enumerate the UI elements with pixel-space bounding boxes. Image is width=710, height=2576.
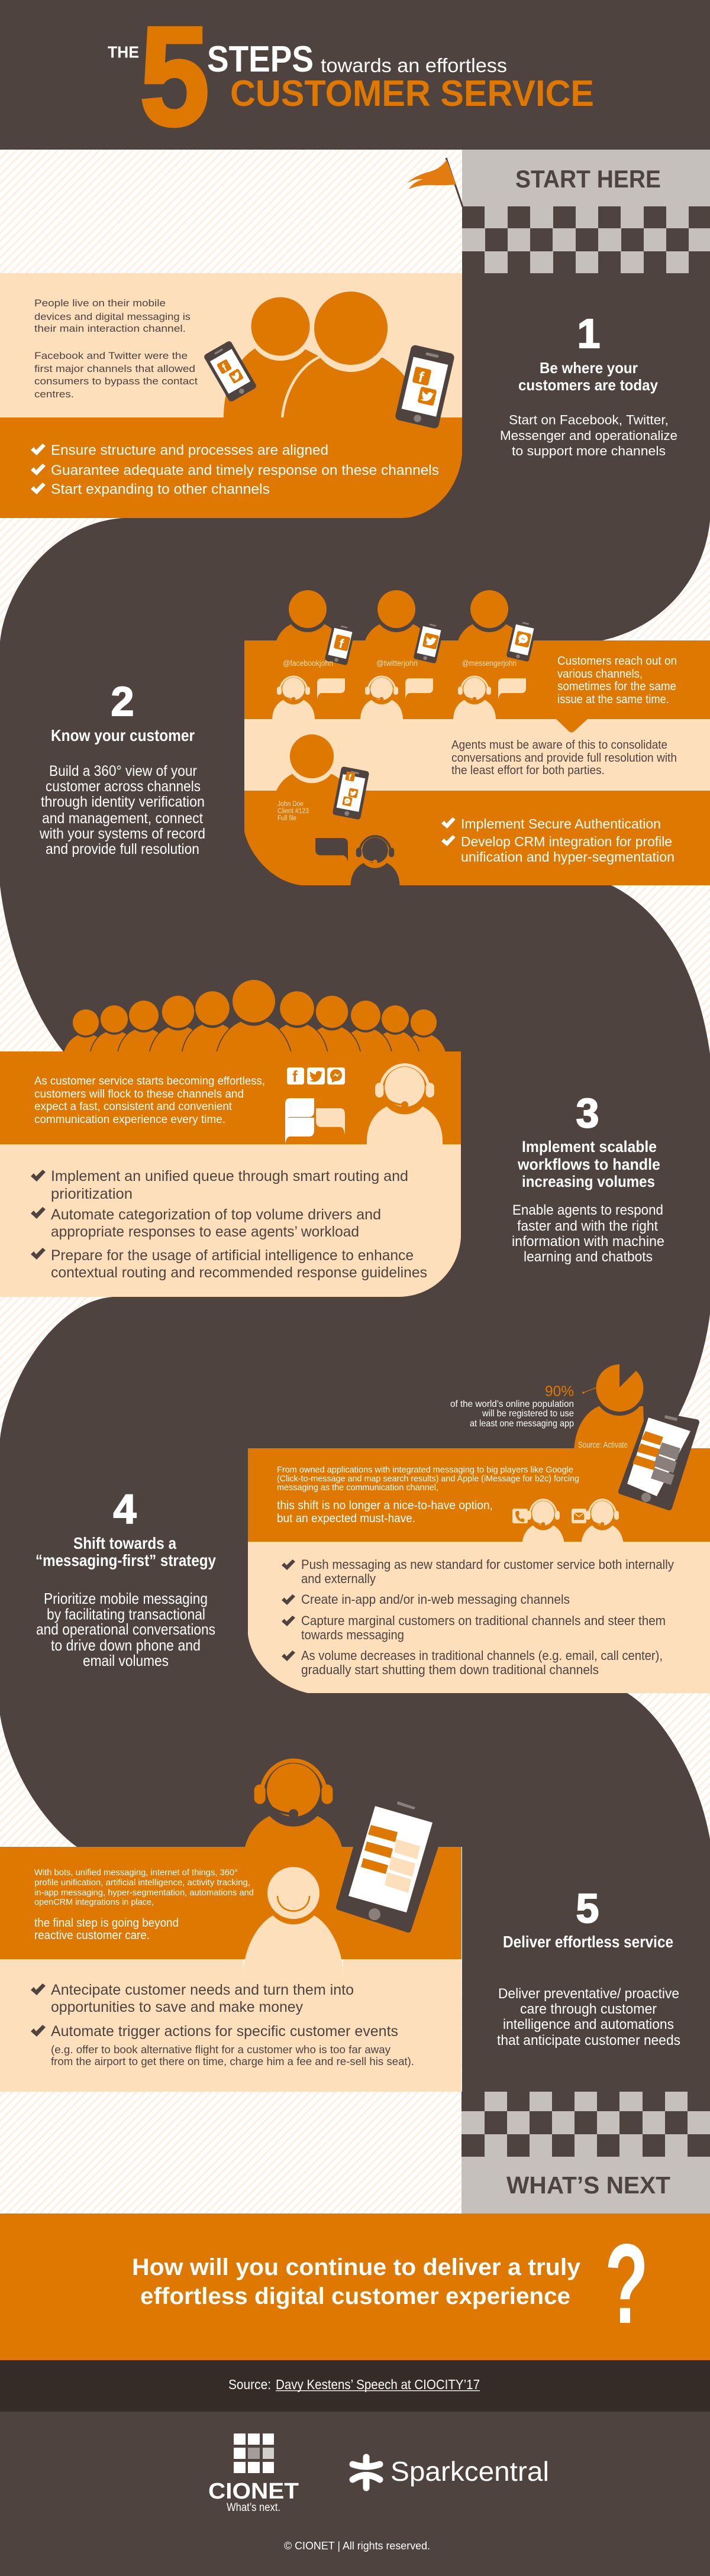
panel: closing question <box>0 2213 710 2360</box>
text: channel handles: @twitterjohn <box>376 658 418 668</box>
text: mobile and messaging intro: People live on their mobile <box>34 297 166 309</box>
step 1 heading and text <box>500 310 677 458</box>
step 2 heading and text: 2 <box>111 678 134 724</box>
text: from owned applications: From owned applications with integrated messaging to big players like Google <box>277 1465 573 1475</box>
step 2 heading and text: with your systems of record <box>39 826 205 842</box>
text: customers flock to channels <box>34 1075 265 1126</box>
step 3 checklist panel: contextual routing and recommended response guidelines <box>51 1264 427 1281</box>
text: mobile and messaging intro: consumers to bypass the contact <box>34 376 198 387</box>
agents with phone and email cards <box>512 1500 624 1550</box>
panel: step 2 <box>244 590 710 888</box>
icon: agent with headset <box>367 1065 443 1146</box>
step 5 heading and text: 5 <box>576 1885 599 1931</box>
text: agents must be aware: conversations and provide full resolution with <box>451 752 677 765</box>
step 5 heading and text: Deliver preventative/ proactive <box>498 1986 679 2002</box>
step 2 heading and text: and provide full resolution <box>46 841 199 857</box>
step 3 checklist panel <box>0 1144 461 1297</box>
illustration: smiling customer <box>243 1867 343 1976</box>
winding dark road <box>0 273 710 2093</box>
title <box>108 0 594 155</box>
step 3 heading and text: 3 <box>576 1090 599 1136</box>
text: mobile and messaging intro: their main interaction channel. <box>34 323 186 334</box>
callout notch <box>556 719 588 732</box>
text: no longer nice to have: but an expected must-have. <box>277 1512 415 1525</box>
text: agents must be aware <box>451 739 677 777</box>
copyright: © CIONET | All rights reserved. <box>284 2540 430 2552</box>
text: with bots: profile unification, artificial intelligence, activity tracking, <box>34 1878 250 1888</box>
text: the final step <box>34 1917 179 1942</box>
title: STEPS <box>207 39 314 80</box>
panel: step 3 <box>0 1051 461 1297</box>
step 4 heading and text: to drive down phone and <box>51 1636 201 1654</box>
step 3 checklist panel: appropriate responses to ease agents’ workload <box>51 1224 359 1240</box>
panel: step 5 <box>0 1761 462 2092</box>
step 1 heading and text: Be where your <box>540 359 638 377</box>
step 3 checklist panel: prioritization <box>51 1186 133 1202</box>
footer background <box>0 2412 710 2576</box>
icon: large phone with chat <box>621 1413 696 1507</box>
step 4 heading and text: and operational conversations <box>36 1620 215 1638</box>
text: mobile and messaging intro: centres. <box>34 389 74 400</box>
step 5 heading and text: Deliver effortless service <box>503 1933 673 1951</box>
source note: Source: Activate <box>578 1440 628 1450</box>
band: agents awareness <box>244 719 710 791</box>
step 2 heading and text: through identity verification <box>41 794 205 810</box>
step 5 checklist panel: from the airport to get there on time, charge him a fee and re-sell his seat). <box>51 2055 414 2067</box>
step 4 checklist panel: Push messaging as new standard for customer service both internally <box>301 1557 674 1572</box>
stat: 90 percent messaging: of the world’s online population <box>450 1399 574 1409</box>
text: with bots: in-app messaging, hyper-segmentation, automations and <box>34 1888 254 1898</box>
step 5 checklist panel: Antecipate customer needs and turn them into <box>51 1982 354 1998</box>
panel: closing question: ? <box>605 2220 648 2347</box>
chart: 90 percent pie person <box>574 1364 646 1450</box>
icons: channel logos: f <box>292 1067 298 1085</box>
step 4 heading and text: email volumes <box>83 1652 169 1669</box>
panel: closing question: How will you continue to deliver a truly <box>132 2254 581 2280</box>
step 1 heading and text: Messenger and operationalize <box>500 428 677 443</box>
stat: 90 percent messaging: will be registered to use <box>482 1409 574 1419</box>
step 4 heading and text: Shift towards a <box>73 1534 176 1552</box>
text: with bots: openCRM integrations in place, <box>34 1898 154 1907</box>
step 4 heading and text: by facilitating transactional <box>47 1605 205 1623</box>
text: no longer nice to have: this shift is no longer a nice-to-have option, <box>277 1499 493 1512</box>
step 4 checklist panel: gradually start shutting them down traditional channels <box>301 1662 599 1677</box>
step 2 heading and text: Know your customer <box>51 726 195 745</box>
step 3 heading and text: increasing volumes <box>522 1173 655 1190</box>
step 3 checklist panel: Automate categorization of top volume drivers and <box>51 1206 381 1223</box>
text: from owned applications <box>277 1465 579 1493</box>
step 3 heading and text: learning and chatbots <box>524 1249 653 1265</box>
step 2 heading and text: customer across channels <box>46 778 201 795</box>
text: customers reach out: issue at the same time. <box>557 693 669 706</box>
text: channel handles: @facebookjohn <box>283 658 333 668</box>
step 3 checklist panel: Implement an unified queue through smart routing and <box>51 1168 408 1185</box>
unified customer profile: John Doe <box>277 801 304 808</box>
step 5 heading and text <box>497 1885 680 2048</box>
text: customers reach out: Customers reach out on <box>557 655 677 668</box>
text: with bots: With bots, unified messaging, internet of things, 360° <box>34 1868 238 1878</box>
text: mobile and messaging intro: first major channels that allowed <box>34 363 195 374</box>
logo: CIONET <box>208 2433 299 2514</box>
text: from owned applications: (Click-to-message and map search results) and Apple (iMessage for b2c) forcing <box>277 1474 579 1484</box>
step 2 checklist: Implement Secure Authentication <box>461 816 661 831</box>
step 2 checklist <box>441 816 674 865</box>
customers on three channels <box>275 590 538 665</box>
step 3 heading and text: workflows to handle <box>517 1156 660 1173</box>
step 4 heading and text: “messaging-first” strategy <box>36 1551 216 1569</box>
panel: step 4 <box>248 1413 710 1693</box>
step 2 heading and text: Build a 360° view of your <box>49 763 197 779</box>
icon: start flag <box>407 158 463 207</box>
step 5 heading and text: care through customer <box>520 2001 657 2017</box>
text: customers reach out <box>557 655 677 706</box>
step 3 heading and text: Implement scalable <box>522 1138 657 1156</box>
title: towards an effortless <box>321 54 507 76</box>
step 4 checklist panel: As volume decreases in traditional channels (e.g. email, call center), <box>301 1648 663 1663</box>
step 4 checklist panel <box>248 1542 710 1693</box>
unified customer profile <box>274 734 369 822</box>
checkered finish pattern <box>462 2092 710 2213</box>
step 1 heading and text: to support more channels <box>512 444 666 458</box>
illustration: crowd of customers <box>62 980 448 1075</box>
panel: step 1 <box>0 273 462 418</box>
panel: step 1 checklist <box>0 344 462 518</box>
step 5 heading and text: intelligence and automations <box>503 2017 674 2033</box>
step 5 heading and text: that anticipate customer needs <box>497 2033 680 2048</box>
step 4 heading and text <box>36 1486 216 1669</box>
text: customers flock to channels: As customer service starts becoming effortless, <box>34 1075 265 1088</box>
step 2 checklist: Develop CRM integration for profile <box>461 834 672 849</box>
panel: step 1 checklist: Guarantee adequate and timely response on these channels <box>51 462 439 478</box>
step 5 checklist panel <box>0 1959 462 2092</box>
what's next label: WHAT’S NEXT <box>506 2172 670 2199</box>
text: agents must be aware: the least effort for both parties. <box>451 764 605 777</box>
step 1 heading and text: Start on Facebook, Twitter, <box>509 413 669 427</box>
text: mobile and messaging intro: Facebook and Twitter were the <box>34 350 188 361</box>
title: CUSTOMER SERVICE <box>230 73 594 114</box>
text: agents must be aware: Agents must be aware of this to consolidate <box>451 739 667 752</box>
step 5 checklist panel: opportunities to save and make money <box>51 1999 303 2015</box>
step 3 heading and text <box>512 1090 664 1265</box>
text: customers flock to channels: customers will flock to these channels and <box>34 1088 244 1101</box>
logo: Sparkcentral: Sparkcentral <box>390 2456 549 2487</box>
source band: Source: <box>228 2377 271 2392</box>
stat: 90 percent messaging <box>450 1383 574 1429</box>
text: channel handles <box>283 658 517 668</box>
text: mobile and messaging intro: devices and digital messaging is <box>34 311 191 322</box>
unified customer profile: Client #123 <box>277 808 309 815</box>
text: from owned applications: messaging as the communication channel, <box>277 1483 438 1493</box>
panel: closing question: effortless digital customer experience <box>140 2283 570 2309</box>
step 2 heading and text: and management, connect <box>42 810 203 827</box>
icon: right phone <box>395 344 455 429</box>
step 1 heading and text: customers are today <box>518 376 658 394</box>
icons: channel logos <box>287 1067 345 1085</box>
logo: CIONET: What’s next. <box>227 2501 280 2514</box>
agent with dark speech bubble <box>315 836 399 888</box>
step 4 checklist panel: Create in-app and/or in-web messaging channels <box>301 1592 570 1607</box>
icon: large phone with chat <box>339 1800 443 1930</box>
source band: Davy Kestens’ Speech at CIOCITY’17 <box>276 2377 480 2392</box>
text: the final step: the final step is going beyond <box>34 1917 179 1930</box>
step 4 checklist panel: towards messaging <box>301 1627 404 1642</box>
illustration: two customers with phones <box>203 290 426 418</box>
text: mobile and messaging intro <box>34 297 198 400</box>
step 3 heading and text: Enable agents to respond <box>512 1202 663 1218</box>
stat: 90 percent messaging: at least one messaging app <box>470 1419 574 1429</box>
text: with bots <box>34 1868 254 1907</box>
step 2 checklist: unification and hyper-segmentation <box>461 849 674 865</box>
title: THE <box>108 43 139 62</box>
stat: 90 percent messaging: 90% <box>545 1383 574 1400</box>
logo: CIONET: CIONET <box>208 2479 299 2504</box>
step 1 heading and text: 1 <box>577 310 600 357</box>
step 4 heading and text: 4 <box>114 1486 137 1532</box>
icons: speech bubbles <box>285 1098 345 1144</box>
agents with speech bubbles <box>272 677 526 722</box>
step 5 checklist panel: Automate trigger actions for specific customer events <box>51 2023 398 2040</box>
text: customers flock to channels: communication experience every time. <box>34 1114 225 1126</box>
panel: step 1 checklist: Ensure structure and processes are aligned <box>51 442 328 458</box>
text: customers reach out: various channels, <box>557 668 643 681</box>
checkered start pattern <box>462 206 710 273</box>
illustration: support agent <box>243 1761 344 1869</box>
step 3 checklist panel: Prepare for the usage of artificial intelligence to enhance <box>51 1247 414 1264</box>
step 4 checklist panel: and externally <box>301 1571 376 1586</box>
start here block <box>462 150 710 206</box>
step 4 checklist panel: Capture marginal customers on traditional channels and steer them <box>301 1613 666 1628</box>
panel: step 1 checklist: Start expanding to other channels <box>51 481 270 497</box>
step 3 heading and text: information with machine <box>512 1234 664 1250</box>
start here block: START HERE <box>515 165 661 193</box>
title: 5 <box>140 0 209 155</box>
step 2 heading and text <box>39 678 205 857</box>
text: channel handles: @messengerjohn <box>462 658 517 668</box>
step 4 heading and text: Prioritize mobile messaging <box>44 1590 208 1607</box>
unified customer profile: Full file <box>277 815 296 822</box>
step 5 checklist panel: (e.g. offer to book alternative flight for a customer who is too far away <box>51 2043 391 2056</box>
text: customers reach out: sometimes for the same <box>557 680 676 693</box>
text: the final step: reactive customer care. <box>34 1929 150 1942</box>
source band <box>0 2360 710 2412</box>
step 3 heading and text: faster and with the right <box>517 1218 658 1234</box>
header background <box>0 0 710 150</box>
text: customers flock to channels: expect a fast, consistent and convenient <box>34 1101 233 1113</box>
text: no longer nice to have <box>277 1499 493 1525</box>
